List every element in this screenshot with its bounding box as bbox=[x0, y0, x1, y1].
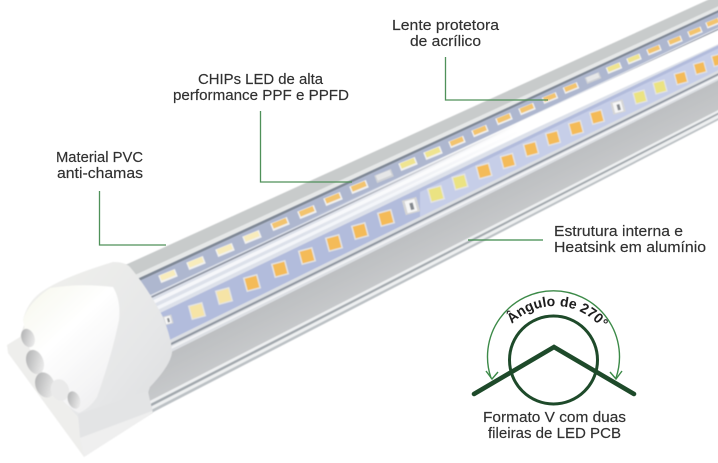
diagram: V-shape 270 degree angle: Ângulo de 270° bbox=[506, 296, 608, 324]
cap lower face bbox=[78, 391, 152, 438]
callout: estrutura interna bbox=[468, 224, 706, 256]
callout: CHIPs LED bbox=[173, 72, 352, 182]
socket holes bbox=[19, 327, 37, 349]
lower inner rail bbox=[120, 60, 718, 377]
callout: lente protetora: de acrílico bbox=[410, 34, 481, 50]
aluminium heatsink bbox=[120, 69, 718, 416]
cap dome bbox=[23, 285, 119, 413]
end cap bbox=[7, 262, 172, 457]
callout: CHIPs LED: performance PPF e PPFD bbox=[173, 88, 349, 104]
curved label bbox=[512, 306, 613, 351]
callout: material PVC bbox=[56, 150, 166, 245]
callout: estrutura interna: Estrutura interna e bbox=[554, 224, 683, 240]
diagram caption: Formato V com duas bbox=[483, 410, 626, 426]
small LED row bbox=[158, 17, 718, 283]
outer acrylic cover top band bbox=[120, 0, 718, 282]
cap base plate with sockets bbox=[7, 325, 84, 457]
bottom rail bbox=[120, 99, 718, 429]
diagram: V-shape 270 degree angle bbox=[472, 290, 636, 406]
V-shaped PCB bbox=[474, 347, 634, 394]
callout: lente protetora: Lente protetora bbox=[392, 18, 500, 34]
callout: lente protetora bbox=[392, 18, 548, 100]
diagram caption: fileiras de LED PCB bbox=[488, 426, 621, 442]
cap bottom lip bbox=[80, 411, 153, 457]
diagram caption bbox=[483, 410, 626, 442]
callout: material PVC: anti-chamas bbox=[57, 166, 143, 182]
callout: estrutura interna: Heatsink em alumínio bbox=[554, 240, 706, 256]
upper LED board bbox=[120, 3, 718, 309]
cap collar bbox=[23, 262, 172, 457]
white reflective stripes bbox=[120, 17, 718, 332]
tube cross-section circle bbox=[510, 316, 598, 404]
callout: CHIPs LED: CHIPs LED de alta bbox=[198, 72, 324, 88]
callout: material PVC: Material PVC bbox=[56, 150, 143, 166]
large LED row bbox=[162, 53, 718, 326]
LED tube body bbox=[120, 0, 718, 429]
lower LED board bbox=[120, 35, 718, 364]
angle arc with arrows bbox=[486, 291, 622, 379]
